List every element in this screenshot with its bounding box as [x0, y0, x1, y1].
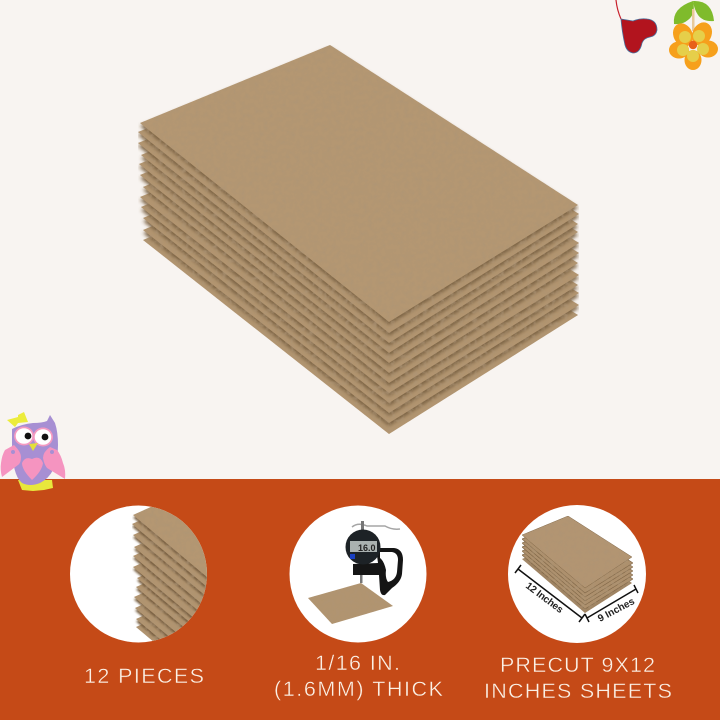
circle: thickness gauge on sheet: [290, 506, 426, 642]
circle: sheet edges close-up: [70, 506, 207, 642]
dimension: 12 inches: 12 Inches: [523, 581, 565, 616]
dimension: 9 inches: 9 Inches: [596, 596, 637, 625]
label: thickness: 1/16 IN.: [315, 651, 400, 675]
decoration: felt heart: [616, 0, 657, 53]
orange footer band: [0, 479, 720, 720]
feature 2: thickness: [274, 506, 444, 701]
feature 3: sheet size: [484, 505, 672, 703]
label: thickness: (1.6MM) THICK: [274, 677, 444, 701]
label: precut size: [484, 653, 672, 703]
decoration: felt flower: [669, 1, 718, 70]
product: stack of 12 felt sheets: [138, 45, 579, 434]
label: 12 pieces: 12 PIECES: [84, 664, 204, 688]
label: precut size: INCHES SHEETS: [484, 679, 672, 703]
circle: stack with dimensions: [508, 505, 646, 643]
circle: thickness gauge on sheet: 16.0: [358, 543, 376, 553]
feature 1: 12 pieces: [70, 506, 207, 683]
label: precut size: PRECUT 9X12: [500, 653, 655, 677]
decoration: felt owl: [1, 412, 65, 491]
label: thickness: [274, 651, 444, 701]
